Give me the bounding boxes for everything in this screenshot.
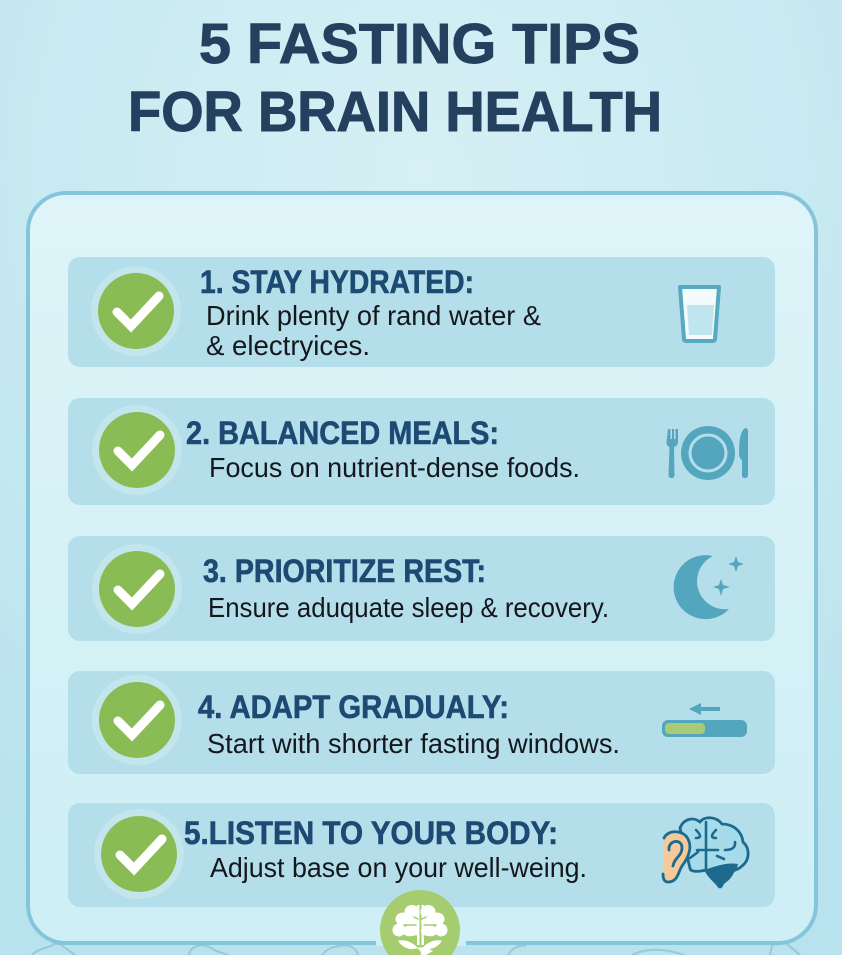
icon: moon and stars — [674, 555, 744, 619]
tip 5 body: Adjust base on your well-weing. — [210, 852, 587, 883]
tip 3 heading: 3. PRIORITIZE REST: — [203, 553, 486, 589]
bottom doodles — [32, 943, 800, 955]
tip 3 body: Ensure aduquate sleep & recovery. — [208, 592, 609, 623]
check icon 4 — [92, 675, 182, 765]
check icon 3 — [92, 544, 182, 634]
tip 1 card — [68, 257, 775, 367]
tip 4 heading: 4. ADAPT GRADUALY: — [198, 689, 509, 725]
icon: white brain — [392, 905, 448, 955]
check icon 5 — [94, 809, 184, 899]
main panel — [28, 193, 816, 943]
title — [128, 12, 662, 144]
tip 4 card — [68, 671, 775, 774]
tip 1 body: & electryices. — [206, 330, 370, 361]
tip 2 heading: 2. BALANCED MEALS: — [186, 415, 499, 451]
icon: plate and cutlery — [666, 426, 748, 480]
icon: progress bar with arrow — [662, 703, 747, 737]
tip 4 body: Start with shorter fasting windows. — [207, 728, 620, 759]
brain badge — [376, 890, 466, 955]
check icon 1 — [91, 266, 181, 356]
tip 1 body: Drink plenty of rand water & — [206, 300, 541, 331]
tip 3 card — [68, 536, 775, 641]
icon: ear and brain — [663, 818, 748, 887]
tip 5 heading: 5.LISTEN TO YOUR BODY: — [184, 815, 558, 851]
tip 2 body: Focus on nutrient-dense foods. — [209, 452, 580, 483]
title: 5 FASTING TIPS — [199, 12, 640, 76]
tip 1 heading: 1. STAY HYDRATED: — [200, 264, 474, 300]
tip 1 body — [206, 300, 541, 361]
tip 5 card — [68, 803, 775, 907]
icon: water glass — [680, 287, 719, 341]
check icon 2 — [92, 405, 182, 495]
tip 2 card — [68, 398, 775, 505]
title: FOR BRAIN HEALTH — [128, 80, 662, 144]
